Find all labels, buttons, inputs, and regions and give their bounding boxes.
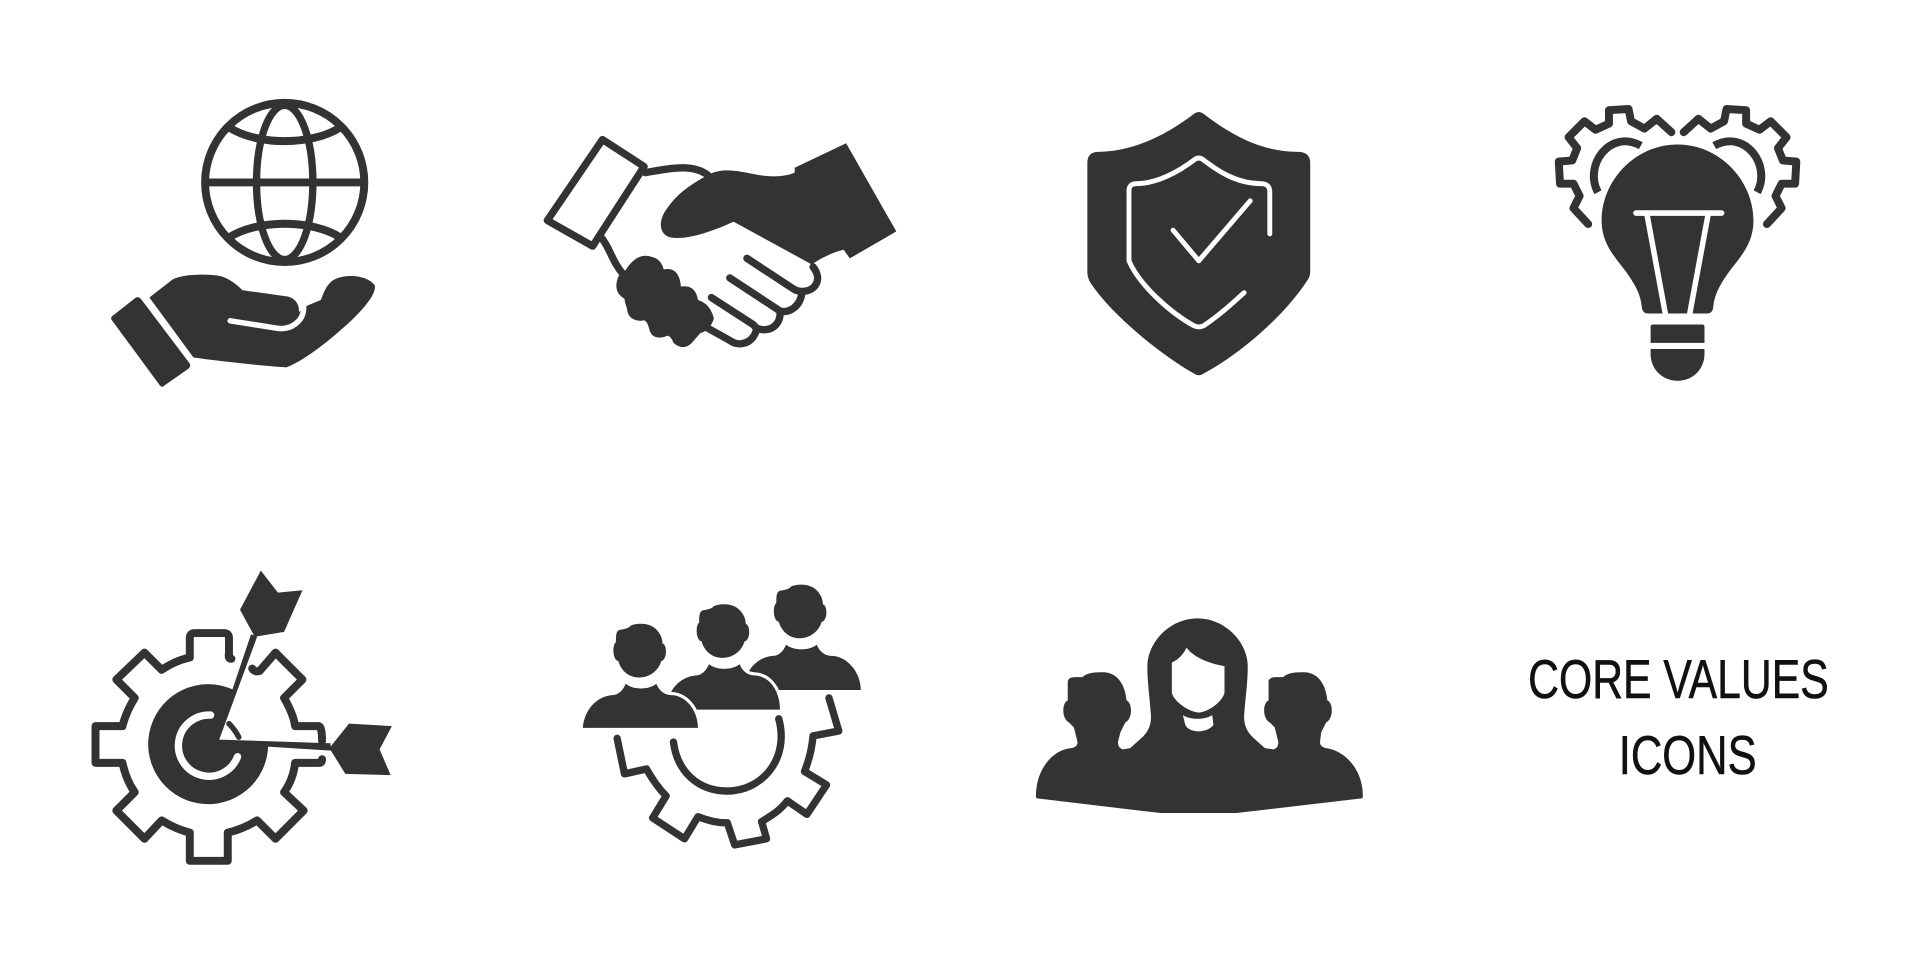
check mark <box>1173 201 1250 261</box>
filament <box>1636 213 1722 313</box>
target inner white arc <box>178 715 238 776</box>
silhouette <box>1036 618 1363 813</box>
icon: light bulb with gears <box>1559 109 1796 381</box>
cuff <box>111 297 190 387</box>
right sleeve and hand <box>661 143 896 264</box>
inner shield line <box>1129 158 1270 327</box>
left gear <box>1559 109 1671 224</box>
person: back <box>743 585 861 690</box>
target ring <box>148 684 268 804</box>
open hand <box>149 275 375 367</box>
gear outline <box>617 698 839 845</box>
left cuff and white hand outline <box>547 140 708 274</box>
gear outline <box>96 633 322 861</box>
icon: handshake <box>547 140 896 347</box>
person: front <box>583 624 698 728</box>
small arc <box>229 724 239 737</box>
right gear <box>1684 109 1796 224</box>
finger line <box>230 307 304 329</box>
person: middle <box>666 604 780 710</box>
icon: hand holding globe <box>111 103 375 387</box>
woman collar <box>1183 715 1213 731</box>
icon: team with gear <box>583 585 861 845</box>
inner arc <box>673 719 781 791</box>
title line 1: CORE VALUES <box>1528 649 1829 710</box>
icon: shield with check mark <box>1087 112 1310 375</box>
bulb base <box>1651 324 1704 381</box>
icon: gear target with arrows <box>96 571 392 861</box>
shield body <box>1087 112 1310 375</box>
arrows <box>214 571 392 775</box>
bulb glass <box>1602 144 1753 313</box>
icon: woman and two men <box>1036 618 1363 813</box>
fingers of white hand <box>708 258 818 344</box>
title text: core values icons <box>1528 649 1829 786</box>
title line 2: ICONS <box>1619 724 1757 786</box>
woman face <box>1172 648 1224 713</box>
globe <box>205 103 364 262</box>
left fist <box>616 256 714 347</box>
